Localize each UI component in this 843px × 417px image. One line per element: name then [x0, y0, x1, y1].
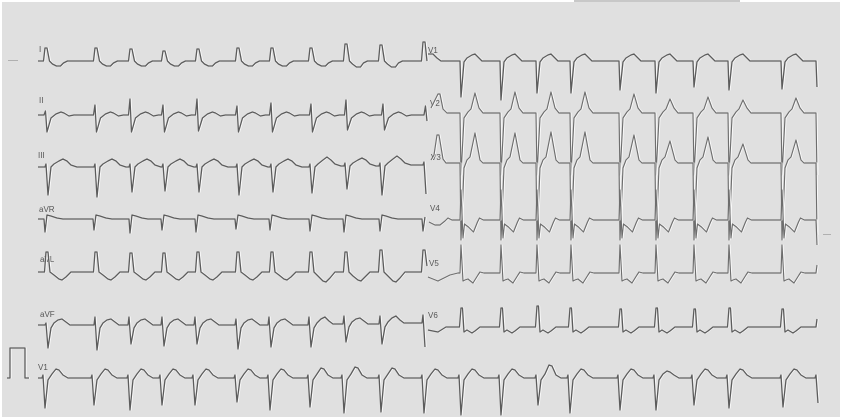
lead V2: V2: [430, 99, 440, 108]
lead aVL: [38, 250, 427, 282]
lead V1 rhythm strip: V1: [38, 363, 48, 372]
stray scan mark left: [8, 60, 18, 61]
lead V5: V5: [429, 259, 439, 268]
lead I: I: [39, 45, 41, 54]
lead V6: [428, 306, 817, 333]
lead II: [38, 96, 427, 132]
lead V4: V4: [430, 204, 440, 213]
lead II: II: [39, 96, 43, 105]
lead aVR: [38, 205, 425, 233]
top scan strip: [574, 0, 740, 2]
lead V4: [429, 190, 817, 245]
lead V3: [431, 132, 817, 240]
lead aVR: aVR: [39, 205, 55, 214]
lead III: III: [38, 151, 45, 160]
lead aVL: aVL: [40, 255, 55, 264]
lead V2: [430, 92, 817, 175]
stray scan mark right: [823, 234, 831, 235]
lead V1: V1: [428, 46, 438, 55]
lead I: [38, 42, 427, 67]
lead V1 rhythm strip: [38, 363, 818, 415]
lead V1: [428, 46, 817, 100]
calibration pulse: [7, 348, 29, 378]
lead aVF: [38, 310, 425, 350]
lead V5: [428, 245, 817, 283]
lead aVF: aVF: [40, 310, 55, 319]
lead III: [38, 151, 426, 197]
lead V6: V6: [428, 311, 438, 320]
lead V3: V3: [431, 153, 441, 162]
